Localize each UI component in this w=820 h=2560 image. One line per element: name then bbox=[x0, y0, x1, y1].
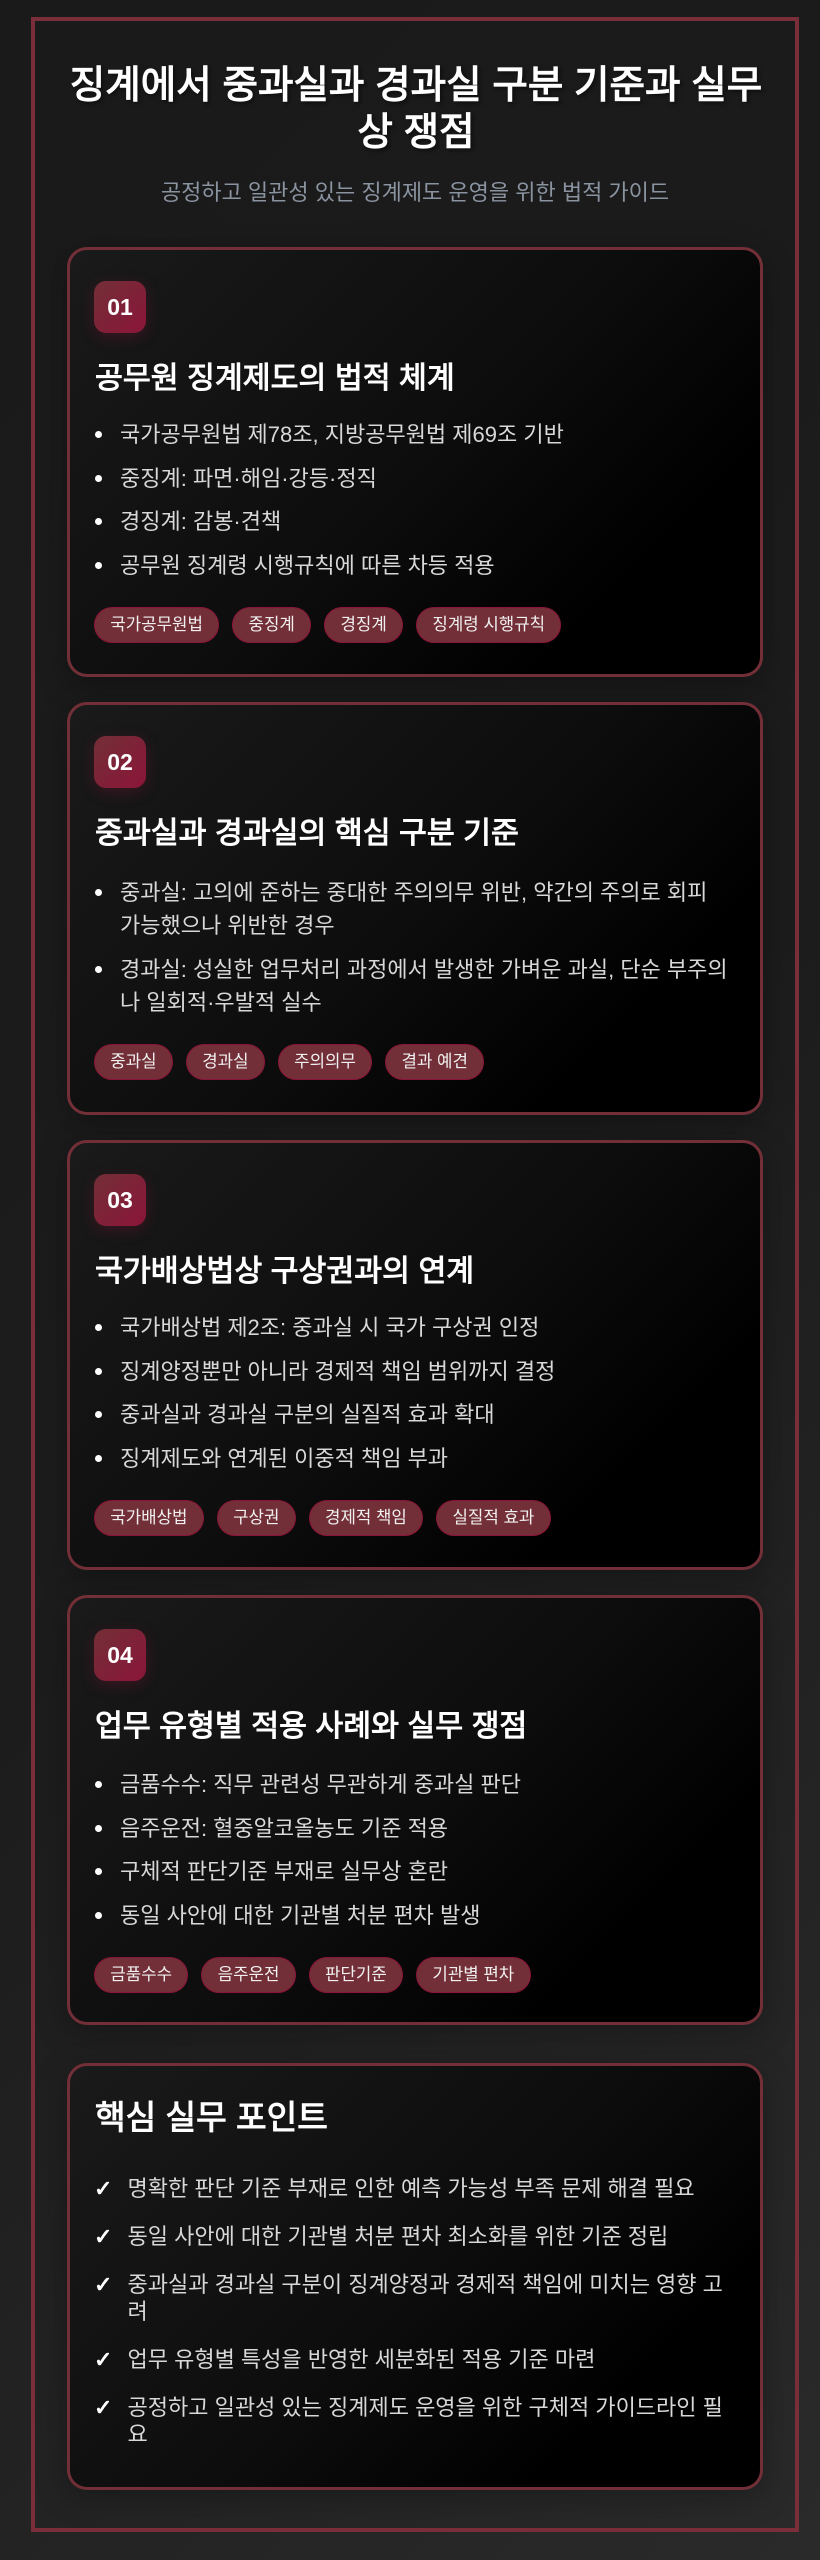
tags 02: 결과 예견 bbox=[402, 1052, 468, 1070]
checklist: 요 bbox=[128, 2422, 148, 2447]
title: 상 쟁점 bbox=[357, 110, 475, 154]
tags 02: 경과실 bbox=[202, 1052, 249, 1070]
heading 01: 공무원 징계제도의 법적 체계 bbox=[95, 362, 455, 394]
panel: key practice points bbox=[67, 2063, 763, 2490]
tags 02 bbox=[94, 1044, 484, 1080]
list 01: 중징계: 파면·해임·강등·정직 bbox=[120, 466, 377, 490]
tags 03 bbox=[94, 1500, 551, 1536]
tags 03: 구상권 bbox=[233, 1508, 279, 1526]
badge 04: 04 bbox=[107, 1642, 133, 1668]
panel: 02 criteria bbox=[67, 702, 763, 1115]
panel: 03 state compensation bbox=[67, 1140, 763, 1570]
tags 03: 경제적 책임 bbox=[325, 1508, 407, 1526]
tags 04 bbox=[94, 1957, 531, 1993]
badge 01 bbox=[94, 281, 146, 333]
panel: 01 legal system bbox=[67, 247, 763, 677]
list 01: 공무원 징계령 시행규칙에 따른 차등 적용 bbox=[120, 552, 495, 578]
checklist: 공정하고 일관성 있는 징계제도 운영을 위한 구체적 가이드라인 필 bbox=[128, 2395, 723, 2420]
tags 04: 금품수수 bbox=[110, 1964, 172, 1984]
heading 03: 국가배상법상 구상권과의 연계 bbox=[95, 1254, 474, 1288]
list 02: 경과실: 성실한 업무처리 과정에서 발생한 가벼운 과실, 단순 부주의 bbox=[120, 956, 728, 982]
tags 04: 기관별 편차 bbox=[432, 1964, 514, 1984]
badge 03: 03 bbox=[107, 1187, 133, 1213]
checklist: 중과실과 경과실 구분이 징계양정과 경제적 책임에 미치는 영향 고 bbox=[128, 2272, 723, 2297]
panel: 04 case types bbox=[67, 1595, 763, 2025]
badge 02 bbox=[94, 736, 146, 788]
heading 04: 업무 유형별 적용 사례와 실무 쟁점 bbox=[95, 1710, 527, 1742]
list 01: 국가공무원법 제78조, 지방공무원법 제69조 기반 bbox=[120, 422, 564, 447]
badge 03 bbox=[94, 1174, 146, 1226]
list 03 bbox=[95, 1315, 555, 1470]
list 04: 금품수수: 직무 관련성 무관하게 중과실 판단 bbox=[120, 1772, 521, 1797]
list 03: 중과실과 경과실 구분의 실질적 효과 확대 bbox=[120, 1402, 495, 1427]
tags 03: 국가배상법 bbox=[110, 1508, 188, 1526]
list 03: 국가배상법 제2조: 중과실 시 국가 구상권 인정 bbox=[120, 1315, 539, 1340]
list 01 bbox=[95, 422, 564, 578]
tags 01 bbox=[94, 607, 561, 643]
checklist bbox=[96, 2176, 723, 2447]
tags 04: 판단기준 bbox=[325, 1964, 387, 1984]
list 01: 경징계: 감봉·견책 bbox=[120, 509, 281, 534]
badge 01: 01 bbox=[107, 294, 133, 320]
checklist: 명확한 판단 기준 부재로 인한 예측 가능성 부족 문제 해결 필요 bbox=[128, 2176, 695, 2201]
list 03: 징계양정뿐만 아니라 경제적 책임 범위까지 결정 bbox=[120, 1358, 555, 1384]
tags 02: 중과실 bbox=[110, 1052, 157, 1070]
tags 01: 중징계 bbox=[249, 614, 295, 634]
heading 02: 중과실과 경과실의 핵심 구분 기준 bbox=[95, 816, 519, 850]
title bbox=[70, 64, 762, 154]
list 03: 징계제도와 연계된 이중적 책임 부과 bbox=[120, 1446, 448, 1470]
tags 01: 징계령 시행규칙 bbox=[432, 614, 545, 634]
list 02 bbox=[95, 880, 728, 1014]
list 04: 구체적 판단기준 부재로 실무상 혼란 bbox=[120, 1859, 448, 1884]
list 04: 동일 사안에 대한 기관별 처분 편차 발생 bbox=[120, 1902, 481, 1928]
list 02: 중과실: 고의에 준하는 중대한 주의의무 위반, 약간의 주의로 회피 bbox=[120, 880, 707, 905]
tags 04: 음주운전 bbox=[218, 1964, 279, 1984]
checklist: 동일 사안에 대한 기관별 처분 편차 최소화를 위한 기준 정립 bbox=[128, 2224, 668, 2249]
list 02: 가능했으나 위반한 경우 bbox=[120, 913, 335, 938]
tags 03: 실질적 효과 bbox=[452, 1508, 534, 1526]
checklist: 려 bbox=[128, 2299, 148, 2324]
badge 04 bbox=[94, 1629, 146, 1681]
tags 01: 경징계 bbox=[340, 614, 387, 634]
list 04: 음주운전: 혈중알코올농도 기준 적용 bbox=[120, 1816, 448, 1840]
subtitle: 공정하고 일관성 있는 징계제도 운영을 위한 법적 가이드 bbox=[161, 180, 669, 205]
tags 02: 주의의무 bbox=[294, 1052, 356, 1070]
tags 01: 국가공무원법 bbox=[110, 614, 203, 634]
heading: key points: 핵심 실무 포인트 bbox=[95, 2100, 328, 2137]
list 02: 나 일회적·우발적 실수 bbox=[120, 990, 322, 1014]
badge 02: 02 bbox=[107, 749, 133, 775]
list 04 bbox=[95, 1772, 521, 1928]
checklist: 업무 유형별 특성을 반영한 세분화된 적용 기준 마련 bbox=[128, 2347, 595, 2372]
title: 징계에서 중과실과 경과실 구분 기준과 실무 bbox=[70, 64, 762, 106]
